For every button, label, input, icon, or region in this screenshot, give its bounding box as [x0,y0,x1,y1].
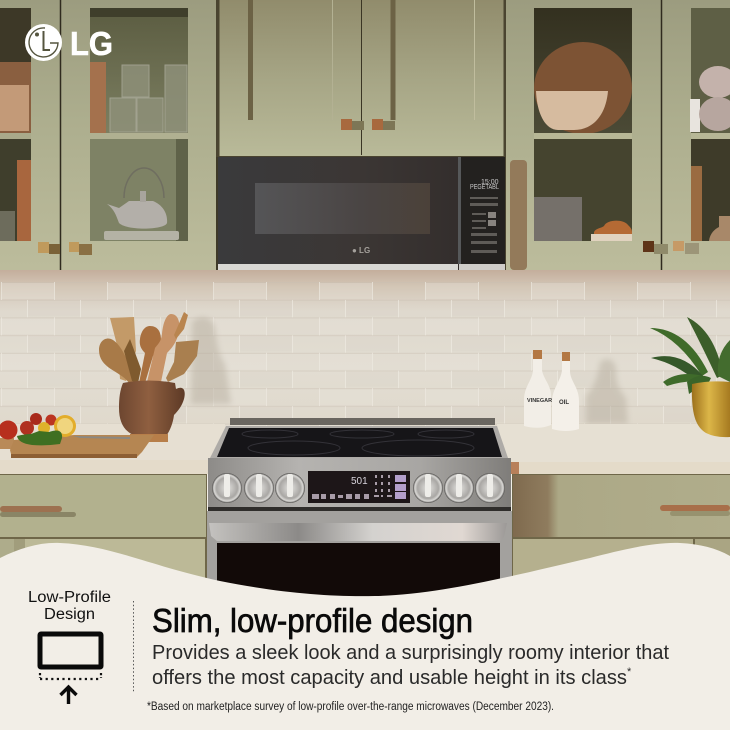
microwave display [470,179,499,191]
body text: offers the most capacity and usable height in its class [152,666,627,689]
microwave keypad [470,197,498,253]
oven display: 501 [351,476,368,487]
cooktop [210,418,508,458]
icon label: Low-Profile Design [28,589,111,623]
bottles: OIL [559,400,569,406]
range [207,418,512,603]
heading: Slim, low-profile design [152,602,473,639]
microwave display: 15:00 [481,179,499,186]
icon label: Low-Profile Design: Design [44,606,95,623]
cutting board with food [0,413,154,458]
microwave display: PEGETABL [470,184,499,191]
lower cabinets [0,474,730,604]
icon label: Low-Profile Design: Low-Profile [28,589,111,606]
bottles [524,350,579,431]
utensil crock [99,312,199,442]
body text: Provides a sleek look and a surprisingly roomy interior that [152,641,669,664]
oven window [217,543,500,603]
backsplash wall [0,270,730,435]
center upper cabinet [216,0,506,157]
logo: LG: LG [70,25,113,62]
oven door [207,511,512,603]
control panel [208,458,511,511]
upper cabinets left [0,0,218,270]
body text: * [627,666,632,678]
oven display [308,471,410,503]
plant in gold pot [650,317,730,437]
knobs [212,473,505,503]
upper cabinets right [504,0,730,270]
microwave [218,157,505,270]
bottom wave panel [0,543,730,730]
body text [152,641,669,689]
door handle [209,523,507,541]
bottle labels: VINEGAR [527,398,552,404]
footnote: *Based on marketplace survey of low-profile over-the-range microwaves (December 2023). [147,701,554,713]
icon: low-profile microwave [40,634,101,704]
icon: up arrow [60,687,76,704]
countertop [0,424,730,474]
icon: teapot and plates [104,168,179,240]
microwave logo: ● LG [352,246,370,255]
logo: LG [25,24,113,62]
